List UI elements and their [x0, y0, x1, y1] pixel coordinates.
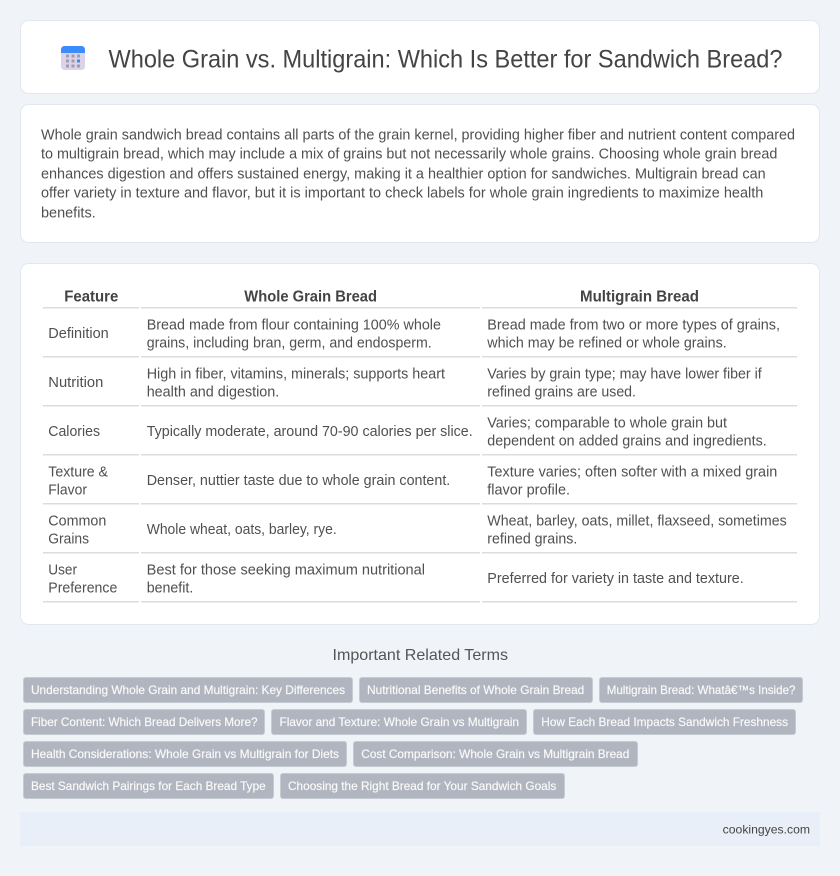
table row: definition: Bread made from flour containing 100% whole: [147, 317, 441, 333]
table header row: [64, 289, 699, 306]
table header row: Whole Grain Bread: [244, 289, 377, 306]
heading: important related terms: Important Related Terms: [332, 647, 508, 664]
tag: [360, 678, 592, 702]
table row: calories: [48, 415, 767, 449]
tag: Multigrain Bread: Whatâ€™s Inside?: [607, 683, 796, 697]
table row: user preference: Preferred for variety in taste and texture.: [487, 571, 744, 587]
table row: common grains: [48, 513, 787, 547]
tag: Health Considerations: Whole Grain vs Multigrain for Diets: [31, 747, 339, 761]
table row: user preference: [48, 562, 744, 596]
tag: Fiber Content: Which Bread Delivers More?: [31, 715, 258, 729]
text block: intro paragraph: offer variety in texture and flavor, but it is important to check labels for whole grain ingredients to maximize health: [41, 185, 763, 201]
table row: calories: Calories: [48, 424, 100, 440]
table row: common grains: Wheat, barley, oats, millet, flaxseed, sometimes: [487, 513, 787, 529]
table row: common grains: Grains: [48, 531, 89, 547]
tag: [354, 742, 638, 766]
icon: calendar: [61, 46, 85, 70]
table row: calories: dependent on added grains and ingredients.: [487, 433, 767, 449]
table row: nutrition: [48, 366, 763, 400]
tag: [600, 678, 802, 702]
table row: texture and flavor: Texture &: [48, 464, 108, 480]
tag: [272, 710, 526, 734]
table row: nutrition: refined grains are used.: [487, 384, 636, 400]
table row: nutrition: Nutrition: [48, 375, 103, 391]
table row: user preference: benefit.: [147, 580, 193, 596]
table row: texture and flavor: [48, 464, 777, 498]
tag: Flavor and Texture: Whole Grain vs Multigrain: [280, 715, 519, 729]
tag: Best Sandwich Pairings for Each Bread Type: [31, 779, 266, 793]
tag: [24, 774, 274, 798]
table row: common grains: Whole wheat, oats, barley, rye.: [147, 522, 337, 538]
table row: definition: Definition: [48, 326, 109, 342]
panel: related term tags: [24, 678, 802, 798]
panel: introduction: [20, 104, 820, 242]
text block: intro paragraph: enhances digestion and offers sustained energy, making it a healthier option for sandwiches. Multigrain bread can: [41, 166, 766, 182]
table row: common grains: refined grains.: [487, 531, 577, 547]
text block: intro paragraph: benefits.: [41, 205, 96, 221]
table row: user preference: Preference: [48, 580, 117, 596]
tag: [24, 678, 352, 702]
tag: Choosing the Right Bread for Your Sandwich Goals: [288, 779, 556, 793]
table header row: Feature: [64, 289, 118, 306]
text block: intro paragraph: [41, 127, 795, 221]
panel: header: [20, 20, 820, 94]
table row: texture and flavor: Denser, nuttier taste due to whole grain content.: [147, 473, 450, 489]
table row: nutrition: Varies by grain type; may have lower fiber if: [487, 366, 763, 382]
table row: nutrition: High in fiber, vitamins, minerals; supports heart: [147, 366, 445, 382]
table row: definition: Bread made from two or more types of grains,: [487, 317, 780, 333]
text block: intro paragraph: to multigrain bread, which may include a mix of grains but not necessarily whole grains. Choosing whole grain bread: [41, 146, 777, 162]
tag: How Each Bread Impacts Sandwich Freshness: [541, 715, 788, 729]
table row: common grains: Common: [48, 513, 106, 529]
table row: definition: [48, 317, 780, 351]
table row: calories: Varies; comparable to whole grain but: [487, 415, 727, 431]
text block: intro paragraph: Whole grain sandwich bread contains all parts of the grain kernel, providing higher fiber and nutrient content compared: [41, 127, 795, 143]
tag: [534, 710, 796, 734]
table header row: Multigrain Bread: [580, 289, 699, 306]
table row: user preference: Best for those seeking maximum nutritional: [147, 562, 425, 578]
tag: Cost Comparison: Whole Grain vs Multigrain Bread: [361, 747, 629, 761]
tag: [24, 742, 346, 766]
table row: calories: Typically moderate, around 70-90 calories per slice.: [147, 424, 473, 440]
footer source text: cookingyes.com: [723, 822, 810, 836]
table row: texture and flavor: Flavor: [48, 482, 87, 498]
table row: texture and flavor: Texture varies; often softer with a mixed grain: [487, 464, 777, 480]
table row: texture and flavor: flavor profile.: [487, 482, 570, 498]
tag: Nutritional Benefits of Whole Grain Bread: [367, 683, 584, 697]
tag: Understanding Whole Grain and Multigrain: Key Differences: [31, 683, 345, 697]
table row: definition: grains, including bran, germ, and endosperm.: [147, 335, 432, 351]
tag: [280, 774, 564, 798]
title: Whole Grain vs. Multigrain: Which Is Better for Sandwich Bread?: [108, 46, 782, 74]
panel: comparison table: [20, 264, 820, 624]
table row: user preference: User: [48, 562, 77, 578]
table row: definition: which may be refined or whole grains.: [486, 335, 727, 351]
table row: nutrition: health and digestion.: [147, 384, 279, 400]
footer: [20, 812, 820, 846]
tag: [24, 710, 264, 734]
